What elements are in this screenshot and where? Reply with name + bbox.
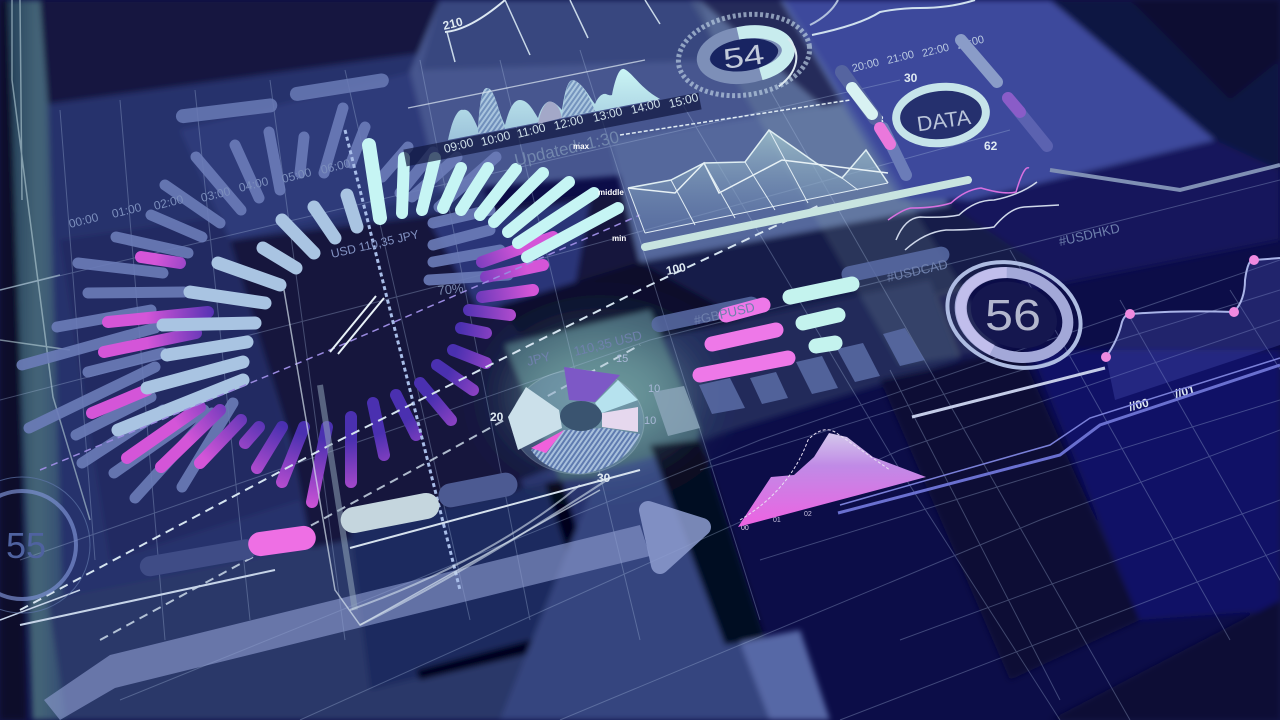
back ring spokes [22,108,508,498]
top pills [175,72,390,124]
bottom left dial 55: 55 [6,525,46,566]
small labels: #USDHKD [1057,220,1121,249]
value 56: 56 [985,291,1041,340]
small labels: 10 [648,383,660,395]
time axis labels: 03:00 [199,184,232,205]
secondary blue-grey bars in the back [650,245,951,436]
bottom left dial 55 [0,477,90,613]
value 8: 8 [877,113,884,127]
small labels: min [612,234,626,243]
small labels: 00 [741,525,749,532]
time axis labels: 01:00 [110,200,143,221]
mountain line chart [620,100,888,233]
time axis labels: 12:00 [552,112,585,133]
time axis labels: 00:00 [67,210,100,231]
small labels: USD 110,35 JPY [330,227,420,261]
time axis labels: 15:00 [667,90,700,111]
radial spoke chart [22,108,618,502]
vertical sliders by DATA ring [842,40,1047,175]
lower pills [138,471,520,578]
ring gauge 54 [673,6,815,104]
small labels: 20 [490,410,504,424]
top area chart [405,0,700,158]
pink area chart [738,430,926,527]
large arrow [44,510,702,720]
magenta ring spokes [92,237,553,502]
small labels: 01 [773,517,781,524]
small labels: 10 [644,415,656,427]
small labels: //01 [1173,382,1196,401]
time axis labels: 14:00 [629,96,662,117]
top right line chart [810,0,975,35]
label DATA: DATA [916,106,972,136]
small labels: #GBPUSD [692,299,756,328]
time axis labels: 11:00 [515,120,547,141]
value 30: 30 [904,71,918,85]
small labels: //00 [1127,395,1150,414]
pink and cyan horizontal bars [700,284,852,375]
small labels: middle [598,188,624,197]
time axis labels: 22:00 [921,42,950,60]
pink and white curves [888,168,1059,250]
long horizontal light bar [645,180,968,247]
time axis labels: 06:00 [319,156,352,177]
time axis labels: 05:00 [280,165,313,186]
small labels: 210 [441,14,464,33]
small labels: Updated: 1:30 [513,127,621,170]
right point line chart [1101,255,1280,400]
small labels: 30 [597,471,611,485]
bright front spokes [118,195,357,430]
value 54: 54 [721,38,766,75]
ring gauge DATA [893,82,989,148]
time axis labels: 23:00 [956,34,985,52]
time axis labels: 02:00 [152,192,185,213]
time axis labels: 04:00 [237,174,270,195]
small labels: 70% [437,280,465,298]
time axis labels [67,34,985,231]
lower right trend lines [838,358,1280,513]
small labels: max [573,142,590,151]
central dashed lines [0,130,820,640]
ring gauge 56 [934,245,1094,385]
value 62: 62 [984,139,998,153]
right grey line [1050,165,1280,190]
time axis labels: 10:00 [479,128,512,149]
time axis labels: 21:00 [886,49,915,67]
small labels: 100 [665,260,688,278]
small labels: #USDCAD [885,256,949,285]
small labels: JPY [525,349,552,369]
small labels [330,14,1196,532]
time axis labels: 09:00 [442,135,475,156]
time axis labels: 20:00 [851,57,880,75]
small labels: 02 [804,511,812,518]
small labels: 110,35 USD [572,327,644,359]
pie chart [508,367,644,474]
small labels: 15 [616,353,628,365]
left edge lines [0,0,90,520]
time axis labels: 13:00 [591,104,624,125]
